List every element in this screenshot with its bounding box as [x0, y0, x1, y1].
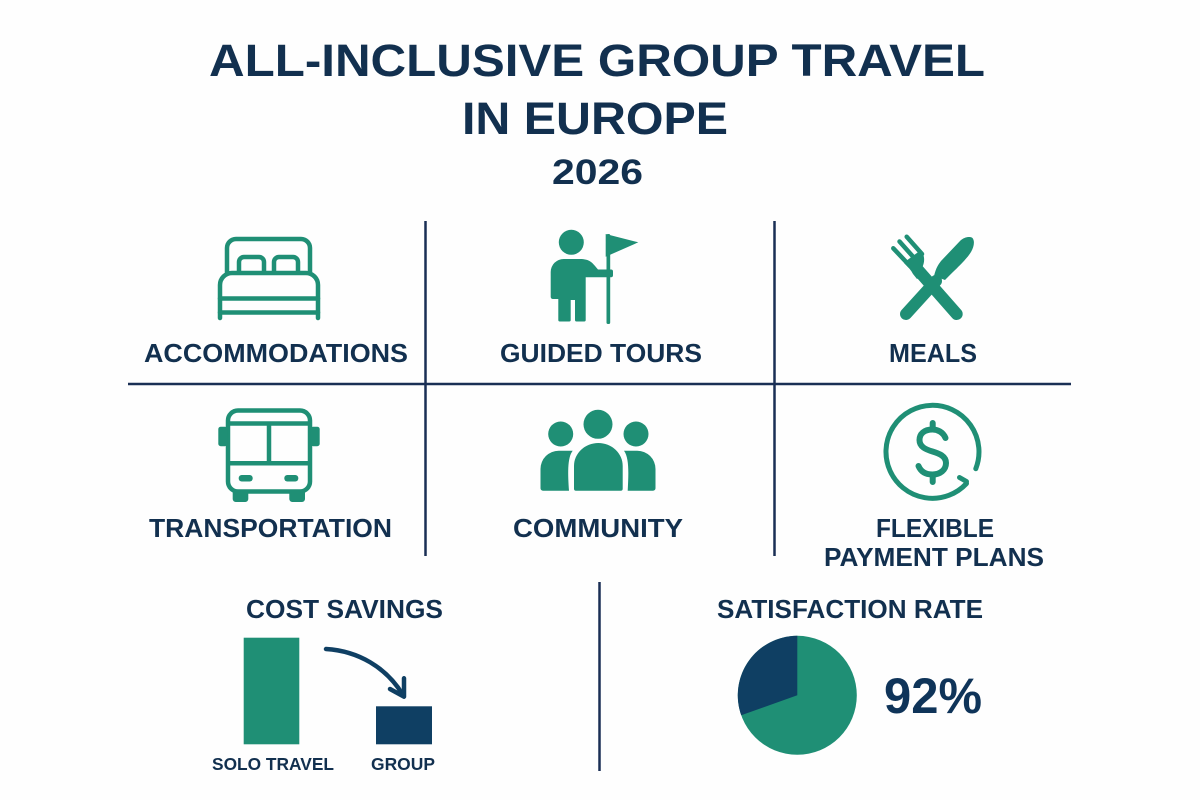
- heading: satisfaction rate: SATISFACTION RATE: [717, 594, 983, 624]
- title: IN EUROPE: [462, 93, 728, 144]
- label: community: COMMUNITY: [513, 513, 683, 543]
- stat: 92%: 92%: [884, 668, 982, 724]
- title: ALL-INCLUSIVE GROUP TRAVEL: [209, 35, 985, 86]
- label: transportation: TRANSPORTATION: [149, 513, 392, 543]
- icon: bus: [218, 410, 320, 502]
- pie chart: [738, 636, 857, 755]
- panel: community: [513, 410, 683, 543]
- panel: flexible payment plans: [824, 405, 1044, 572]
- label: group: GROUP: [371, 754, 435, 774]
- panel: cost savings: [212, 594, 443, 774]
- bar: group: [376, 706, 432, 744]
- icon: dollar in circular arrow: [886, 405, 979, 498]
- panel: meals: [889, 237, 977, 368]
- arrow: savings drop: [326, 649, 404, 697]
- icon: guide with flag: [551, 230, 638, 324]
- label: accommodations: ACCOMMODATIONS: [144, 338, 408, 368]
- bar chart: solo vs group: [212, 638, 435, 774]
- label: solo travel: SOLO TRAVEL: [212, 754, 334, 774]
- label: flexible payment plans: [824, 513, 1044, 572]
- panel: transportation: [149, 410, 392, 543]
- title: [209, 35, 985, 144]
- icon: three people: [540, 410, 656, 491]
- label: guided tours: GUIDED TOURS: [500, 338, 702, 368]
- subtitle: year: 2026: [552, 153, 643, 192]
- icon: fork and knife: [893, 237, 974, 314]
- panel: guided tours: [500, 230, 702, 368]
- label: flexible payment plans: FLEXIBLE: [876, 513, 994, 543]
- label: meals: MEALS: [889, 338, 977, 368]
- icon: bed: [220, 239, 318, 318]
- panel: satisfaction rate: [717, 594, 983, 755]
- panel: accommodations: [144, 239, 408, 368]
- label: flexible payment plans: PAYMENT PLANS: [824, 542, 1044, 572]
- heading: cost savings: COST SAVINGS: [246, 594, 443, 624]
- bar: solo travel: [244, 638, 299, 744]
